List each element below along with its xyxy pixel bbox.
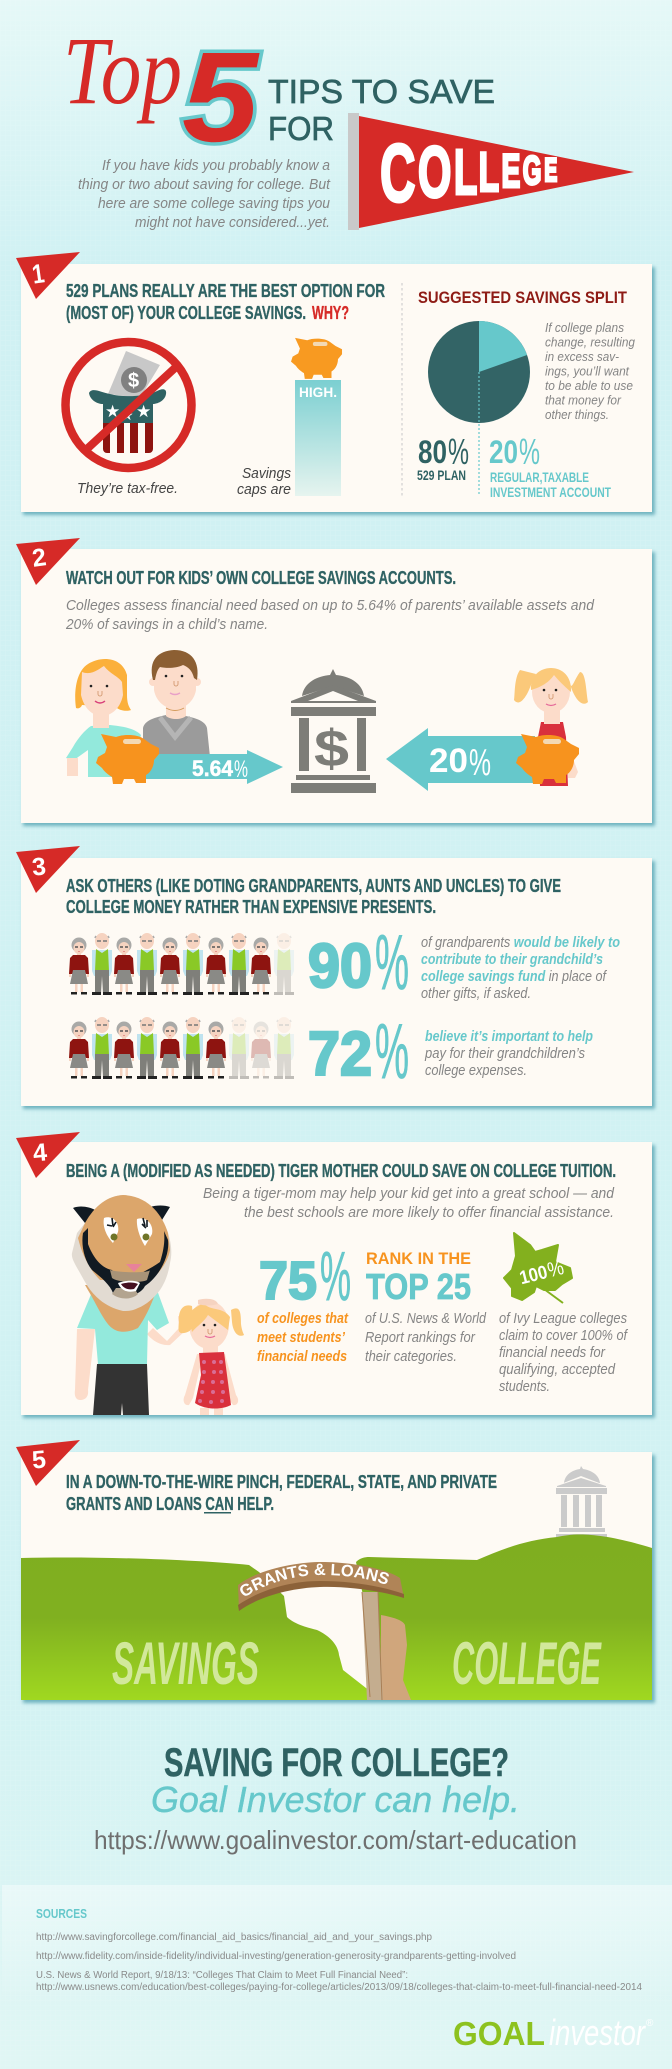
stat 72 percent: 72 bbox=[308, 1020, 372, 1089]
stat 75 percent: 75 bbox=[259, 1251, 317, 1311]
icon: bank bbox=[291, 669, 376, 793]
stat 75 percent: meet students’ bbox=[257, 1330, 346, 1346]
intro text bbox=[78, 158, 331, 231]
landscape: hills bbox=[21, 1534, 652, 1700]
paragraph 4: the best schools are more likely to offer financial assistance. bbox=[244, 1205, 614, 1221]
icon: no tax hat: ★ bbox=[121, 407, 134, 423]
note: other things. bbox=[545, 407, 609, 422]
stat 20: REGULAR,TAXABLE bbox=[490, 469, 589, 485]
icon: piggy on column bbox=[291, 338, 342, 496]
panel 5: grants and loans bbox=[16, 1440, 658, 1706]
logo: goal investor bbox=[453, 2012, 654, 2053]
heading 1: (MOST OF) YOUR COLLEGE SAVINGS. bbox=[66, 302, 306, 323]
note: ings, you’ll want bbox=[545, 364, 630, 378]
intro text: If you have kids you probably know a bbox=[102, 158, 330, 174]
stat top 25: TOP 25 bbox=[366, 1266, 471, 1307]
paragraph 2 bbox=[65, 598, 595, 633]
badge 4: 4 bbox=[32, 1138, 48, 1167]
arrow 20 percent: 20 bbox=[429, 742, 468, 780]
text ivy league: of Ivy League colleges bbox=[499, 1311, 627, 1327]
note: in excess sav- bbox=[545, 349, 620, 364]
heading 3 bbox=[66, 875, 561, 917]
source list: http://www.fidelity.com/inside-fidelity/individual-investing/generation-generosity-grandparents-getting-involved bbox=[36, 1951, 516, 1962]
icon: college building bbox=[556, 1466, 607, 1540]
text ivy league: students. bbox=[499, 1379, 550, 1395]
stat top 25: their categories. bbox=[365, 1349, 457, 1365]
pennant: college: E bbox=[501, 146, 520, 198]
arrow 5.64 percent: % bbox=[234, 756, 248, 783]
text ivy league: financial needs for bbox=[499, 1345, 606, 1361]
call to action bbox=[94, 1741, 577, 1855]
heading tips to save: TIPS TO SAVE bbox=[268, 73, 495, 110]
heading 2: WATCH OUT FOR KIDS’ OWN COLLEGE SAVINGS ACCOUNTS. bbox=[66, 567, 456, 588]
stat 75 percent: financial needs bbox=[257, 1349, 347, 1365]
panel 2: kids accounts bbox=[16, 538, 655, 826]
text 72 percent: pay for their grandchildren’s bbox=[424, 1046, 585, 1062]
icon: ivy leaf bbox=[504, 1233, 572, 1303]
pennant: college: G bbox=[523, 148, 541, 192]
text 90 percent: contribute to their grandchild’s bbox=[421, 952, 603, 968]
paragraph 2: Colleges assess financial need based on up to 5.64% of parents’ available assets and bbox=[66, 598, 595, 614]
text 90 percent: other gifts, if asked. bbox=[421, 986, 531, 1002]
icon: ivy leaf: 100 bbox=[518, 1262, 550, 1289]
icon: daughter bbox=[179, 1299, 244, 1415]
heading 1 bbox=[66, 280, 385, 323]
badge 2 bbox=[16, 538, 80, 585]
icon: woman bbox=[66, 659, 141, 777]
logo: goal investor: ® bbox=[646, 2018, 654, 2029]
stat 20: 20 bbox=[489, 434, 518, 470]
heading 5: IN A DOWN-TO-THE-WIRE PINCH, FEDERAL, STATE, AND PRIVATE bbox=[66, 1471, 497, 1492]
arrow 5.64 percent: 5.64 bbox=[192, 756, 234, 781]
text ivy league: claim to cover 100% of bbox=[499, 1328, 629, 1344]
intro text: might not have considered...yet. bbox=[135, 215, 330, 231]
intro text: here are some college saving tips you bbox=[98, 196, 330, 212]
caption savings caps: Savings bbox=[242, 465, 291, 482]
icon: no tax hat: ★ bbox=[105, 402, 120, 421]
logo: goal investor: GOAL bbox=[453, 2015, 545, 2052]
caption savings caps: caps are bbox=[237, 481, 291, 498]
heading for: FOR bbox=[268, 110, 334, 147]
text 72 percent: college expenses. bbox=[425, 1063, 527, 1079]
badge 4 bbox=[16, 1132, 80, 1178]
text 90 percent bbox=[421, 935, 620, 1002]
text ivy league: qualifying, accepted bbox=[499, 1362, 616, 1378]
pennant: college bbox=[348, 113, 634, 230]
label savings: SAVINGS bbox=[112, 1630, 259, 1697]
pennant: college: L bbox=[479, 140, 499, 203]
heading 5: GRANTS AND LOANS CAN HELP. bbox=[66, 1493, 274, 1514]
badge 3 bbox=[16, 846, 80, 893]
grandparents row 72 percent bbox=[69, 1017, 294, 1079]
stat top 25 bbox=[365, 1249, 487, 1365]
source list: U.S. News & World Report, 9/18/13: “Colleges That Claim to Meet Full Financial Need”: bbox=[36, 1970, 408, 1981]
icon: no tax hat: $ bbox=[128, 370, 139, 392]
numeral 5: 5 bbox=[182, 26, 260, 169]
stat top 25: RANK IN THE bbox=[366, 1249, 471, 1268]
icon: man bbox=[143, 650, 210, 757]
stat 90 percent: 90 bbox=[308, 932, 372, 1001]
icon: no tax hat: ★ bbox=[136, 402, 151, 421]
heading 3: COLLEGE MONEY RATHER THAN EXPENSIVE PRESENTS. bbox=[66, 896, 436, 917]
badge 1: 1 bbox=[30, 258, 46, 290]
panel 4: tiger mother: % bbox=[320, 1237, 351, 1315]
stat top 25: of U.S. News & World bbox=[365, 1311, 487, 1327]
sources heading: SOURCES bbox=[36, 1906, 87, 1921]
arrow 20 percent bbox=[386, 728, 535, 791]
panel 3: ask others bbox=[16, 846, 655, 1109]
stat 80: 529 PLAN bbox=[417, 467, 466, 483]
panel 3: ask others: % bbox=[375, 1007, 409, 1095]
badge 2: 2 bbox=[30, 543, 48, 573]
stat 80: % bbox=[448, 431, 469, 472]
source list bbox=[36, 1932, 642, 1993]
icon: left piggy bbox=[96, 734, 159, 784]
sign: grants and loans: GRANTS & LOANS bbox=[240, 1564, 389, 1596]
text 90 percent: of grandparents would be likely to bbox=[421, 935, 620, 951]
stat 20: INVESTMENT ACCOUNT bbox=[490, 484, 611, 500]
source list: http://www.usnews.com/education/best-colleges/paying-for-college/articles/2013/09/18/colleges-that-claim-to-meet-full-financial-need-2014 bbox=[36, 1982, 642, 1993]
logo: goal investor: investor bbox=[549, 2012, 647, 2053]
pennant: college: E bbox=[544, 152, 557, 188]
stat 80: 80 bbox=[418, 434, 447, 470]
stat 20 bbox=[489, 431, 611, 500]
panel 4: tiger mother bbox=[16, 1132, 655, 1418]
badge 5 bbox=[16, 1440, 80, 1486]
stat 80 bbox=[417, 431, 469, 483]
stat 72 percent bbox=[308, 1007, 409, 1095]
badge 1 bbox=[16, 252, 80, 299]
icon: girl bbox=[514, 668, 588, 786]
text 72 percent bbox=[424, 1029, 593, 1079]
panel 3: ask others: % bbox=[375, 918, 409, 1006]
caption savings caps bbox=[237, 465, 291, 498]
note: to be able to use bbox=[545, 378, 633, 393]
icon: tiger mother bbox=[72, 1195, 186, 1415]
stat 90 percent bbox=[308, 918, 409, 1006]
sources panel bbox=[2, 1885, 672, 2007]
heading 1: 529 PLANS REALLY ARE THE BEST OPTION FOR bbox=[66, 280, 385, 301]
pennant: college: O bbox=[418, 132, 452, 213]
note bbox=[545, 320, 636, 422]
title bbox=[63, 17, 495, 169]
pennant: college: L bbox=[454, 137, 477, 209]
text 72 percent: believe it’s important to help bbox=[425, 1029, 593, 1045]
icon: right piggy bbox=[516, 734, 579, 784]
heading 1: WHY? bbox=[312, 302, 349, 323]
badge 5: 5 bbox=[31, 1445, 47, 1475]
note: If college plans bbox=[545, 320, 624, 335]
icon: bank: $ bbox=[314, 720, 349, 778]
grandparents row 90 percent bbox=[69, 933, 294, 995]
caption tax free: They’re tax-free. bbox=[77, 480, 178, 497]
stat 20: % bbox=[519, 431, 540, 472]
call to action: Goal Investor can help. bbox=[151, 1779, 520, 1820]
arrow 5.64 percent bbox=[145, 750, 283, 784]
arrow 20 percent: % bbox=[469, 742, 491, 784]
pie chart bbox=[428, 321, 530, 495]
text ivy league bbox=[499, 1311, 629, 1395]
stat 75 percent: of colleges that bbox=[257, 1311, 349, 1327]
paragraph 4 bbox=[203, 1186, 615, 1221]
heading suggested split: SUGGESTED SAVINGS SPLIT bbox=[418, 288, 628, 307]
call to action: SAVING FOR COLLEGE? bbox=[164, 1741, 509, 1785]
stat top 25: Report rankings for bbox=[365, 1330, 476, 1346]
call to action: https://www.goalinvestor.com/start-education bbox=[94, 1825, 577, 1855]
pennant: college: C bbox=[380, 128, 416, 219]
stat 75 percent bbox=[257, 1237, 351, 1365]
text 90 percent: college savings fund in place of bbox=[421, 969, 608, 985]
note: change, resulting bbox=[545, 334, 636, 350]
intro text: thing or two about saving for college. But bbox=[78, 177, 331, 193]
heading 5 bbox=[66, 1471, 497, 1514]
panel 1: 529 plans bbox=[16, 252, 655, 515]
icon: piggy on column: HIGH. bbox=[299, 384, 337, 400]
paragraph 4: Being a tiger-mom may help your kid get into a great school — and bbox=[203, 1186, 615, 1202]
icon: ivy leaf: % bbox=[545, 1256, 566, 1282]
paragraph 2: 20% of savings in a child’s name. bbox=[65, 617, 268, 633]
script word Top: Top bbox=[63, 17, 182, 124]
badge 3: 3 bbox=[31, 852, 47, 882]
source list: http://www.savingforcollege.com/financial_aid_basics/financial_aid_and_your_savings.php bbox=[36, 1932, 432, 1943]
note: that money for bbox=[545, 392, 622, 408]
icon: no tax hat bbox=[66, 342, 192, 468]
